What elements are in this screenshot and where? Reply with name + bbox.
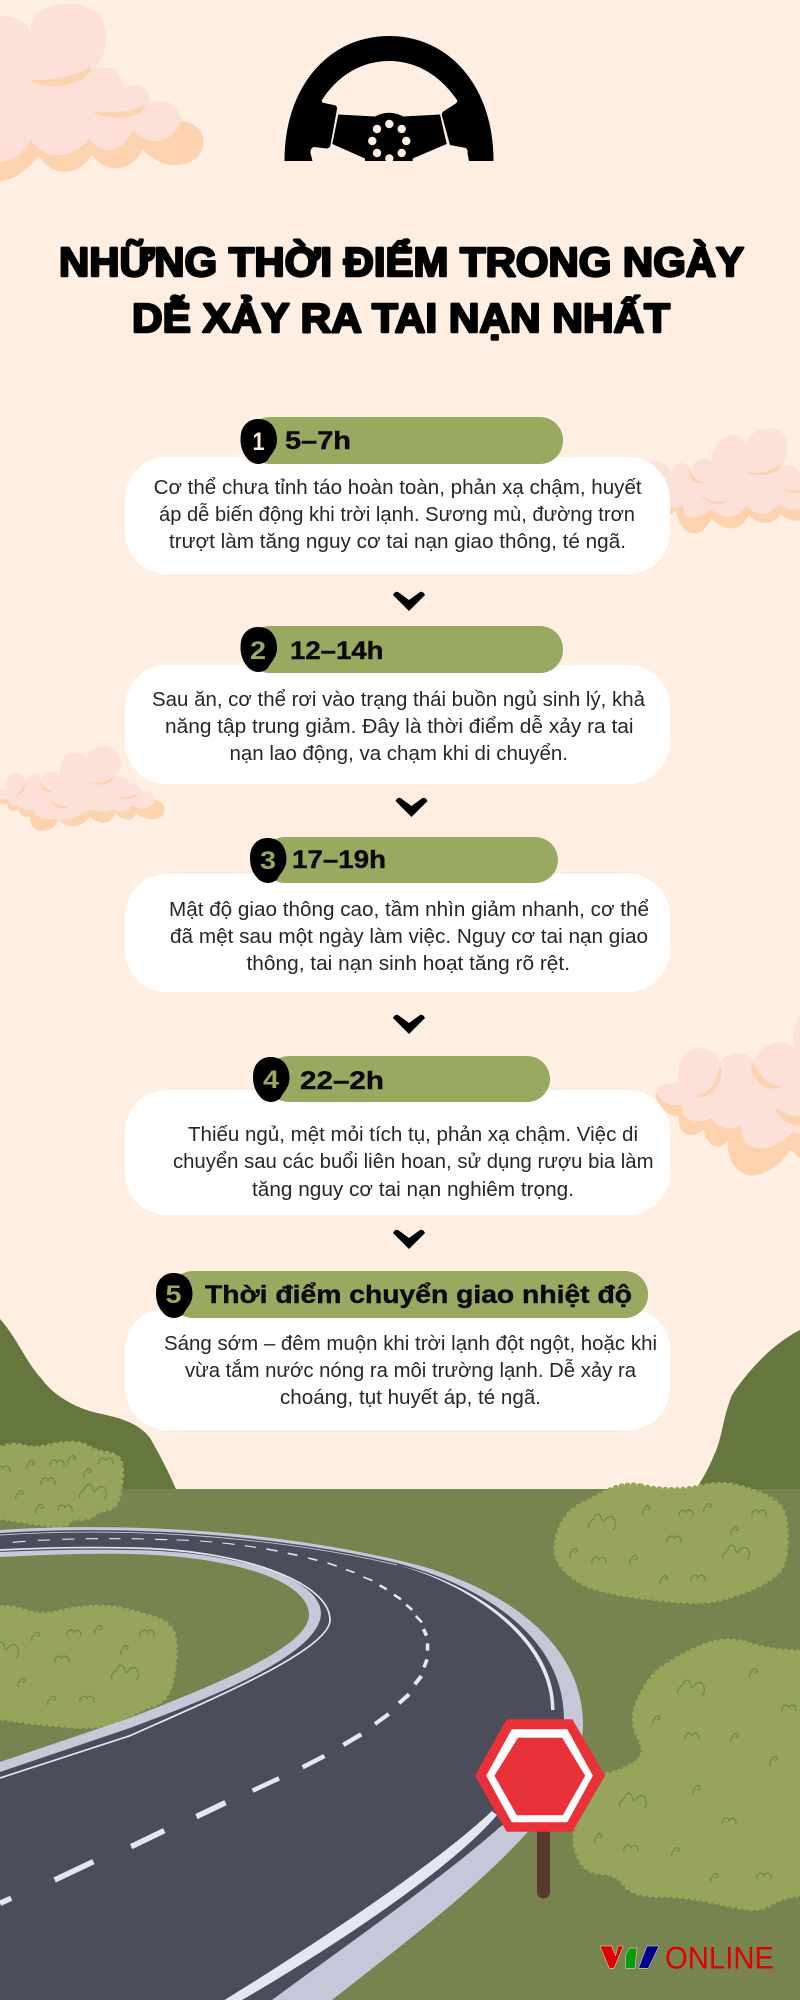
bush: middle left — [0, 1607, 175, 1726]
number 5: 5 — [166, 1281, 182, 1309]
card 2 — [125, 665, 670, 784]
pill 4 — [266, 1056, 550, 1102]
landscape: ground — [0, 1489, 800, 2000]
body text 5: vừa tắm nước nóng ra môi trường lạnh. Dễ xảy ra — [185, 1359, 637, 1382]
heading 4: 22–2h — [300, 1067, 384, 1095]
body text 2: năng tập trung giảm. Đây là thời điểm dễ xảy ra tai — [165, 715, 634, 738]
body text 1: trượt làm tăng nguy cơ tai nạn giao thông, té ngã. — [169, 531, 626, 553]
body text 3: Mật độ giao thông cao, tầm nhìn giảm nhanh, cơ thể — [169, 899, 649, 921]
card 5 — [125, 1308, 670, 1430]
arrow 1 — [393, 592, 425, 611]
body text 5: Sáng sớm – đêm muộn khi trời lạnh đột ngột, hoặc khi — [164, 1333, 657, 1355]
pill 2 — [247, 626, 563, 673]
badge 4 — [253, 1057, 290, 1102]
body text 1: áp dễ biến động khi trời lạnh. Sương mù, đường trơn — [159, 503, 635, 526]
number 4: 4 — [263, 1066, 279, 1094]
logo: VTV Online: ONLINE — [665, 1940, 774, 1976]
landscape: right hill — [696, 1330, 800, 1489]
cloud: right upper — [650, 428, 800, 533]
panel: step 3 — [125, 837, 670, 992]
arrow 2 — [396, 798, 428, 817]
body text 3: đã mệt sau một ngày làm việc. Nguy cơ tai nạn giao — [170, 926, 648, 948]
body text 3: thông, tai nạn sinh hoạt tăng rõ rệt. — [246, 953, 570, 975]
pill 1 — [247, 417, 563, 464]
pill 3 — [262, 837, 558, 883]
arrow 4 — [393, 1230, 425, 1249]
cloud: left middle — [0, 747, 165, 831]
heading 1: 5–7h — [285, 427, 351, 455]
arrow 3 — [393, 1015, 425, 1034]
badge 3 — [250, 838, 286, 883]
heading 5: Thời điểm chuyển giao nhiệt độ — [205, 1281, 632, 1309]
pill 5 — [170, 1271, 648, 1318]
body text 4: chuyển sau các buổi liên hoan, sử dụng rượu bia làm — [173, 1151, 654, 1173]
landscape: left hill — [0, 1319, 176, 1489]
body text 3 — [169, 899, 649, 975]
panel: step 1 — [125, 417, 670, 574]
panel: step 2 — [125, 626, 670, 784]
panel: step 4 — [125, 1056, 670, 1215]
icon: stop sign — [475, 1719, 605, 1899]
title — [59, 238, 744, 341]
heading 2: 12–14h — [290, 637, 384, 665]
body text 4: Thiếu ngủ, mệt mỏi tích tụ, phản xạ chậm. Việc di — [188, 1124, 638, 1146]
body text 2 — [152, 689, 646, 765]
title: DỄ XẢY RA TAI NẠN NHẤT — [132, 295, 670, 341]
card 3 — [125, 874, 670, 992]
card 1 — [125, 457, 670, 574]
panel: step 5 — [125, 1271, 670, 1430]
road — [0, 1527, 583, 2000]
body text 2: nạn lao động, va chạm khi di chuyển. — [230, 743, 568, 765]
badge 2 — [241, 627, 277, 672]
body text 4: tăng nguy cơ tai nạn nghiêm trọng. — [252, 1179, 574, 1201]
body text 5 — [164, 1333, 657, 1409]
body text 2: Sau ăn, cơ thể rơi vào trạng thái buồn ngủ sinh lý, khả — [152, 689, 646, 711]
heading 3: 17–19h — [292, 846, 386, 874]
bush: upper left — [0, 1443, 121, 1525]
logo: VTV Online — [600, 1940, 774, 1976]
number 3: 3 — [260, 847, 276, 875]
cloud: top left — [0, 4, 203, 181]
body text 5: choáng, tụt huyết áp, té ngã. — [280, 1387, 541, 1409]
body text 4 — [173, 1124, 654, 1201]
road centre dashes — [0, 1539, 428, 1903]
bush: lower right — [575, 1641, 800, 1908]
badge 1 — [241, 419, 277, 464]
number 2: 2 — [250, 637, 266, 665]
cloud: right lower — [655, 1015, 800, 1176]
icon: steering wheel — [284, 36, 494, 167]
number 1: 1 — [252, 428, 265, 456]
title: NHỮNG THỜI ĐIỂM TRONG NGÀY — [59, 238, 744, 285]
card 4 — [125, 1090, 670, 1215]
badge 5 — [156, 1273, 192, 1318]
body text 1: Cơ thể chưa tỉnh táo hoàn toàn, phản xạ chậm, huyết — [154, 477, 642, 499]
bush: upper right — [556, 1485, 786, 1601]
body text 1 — [154, 477, 642, 553]
